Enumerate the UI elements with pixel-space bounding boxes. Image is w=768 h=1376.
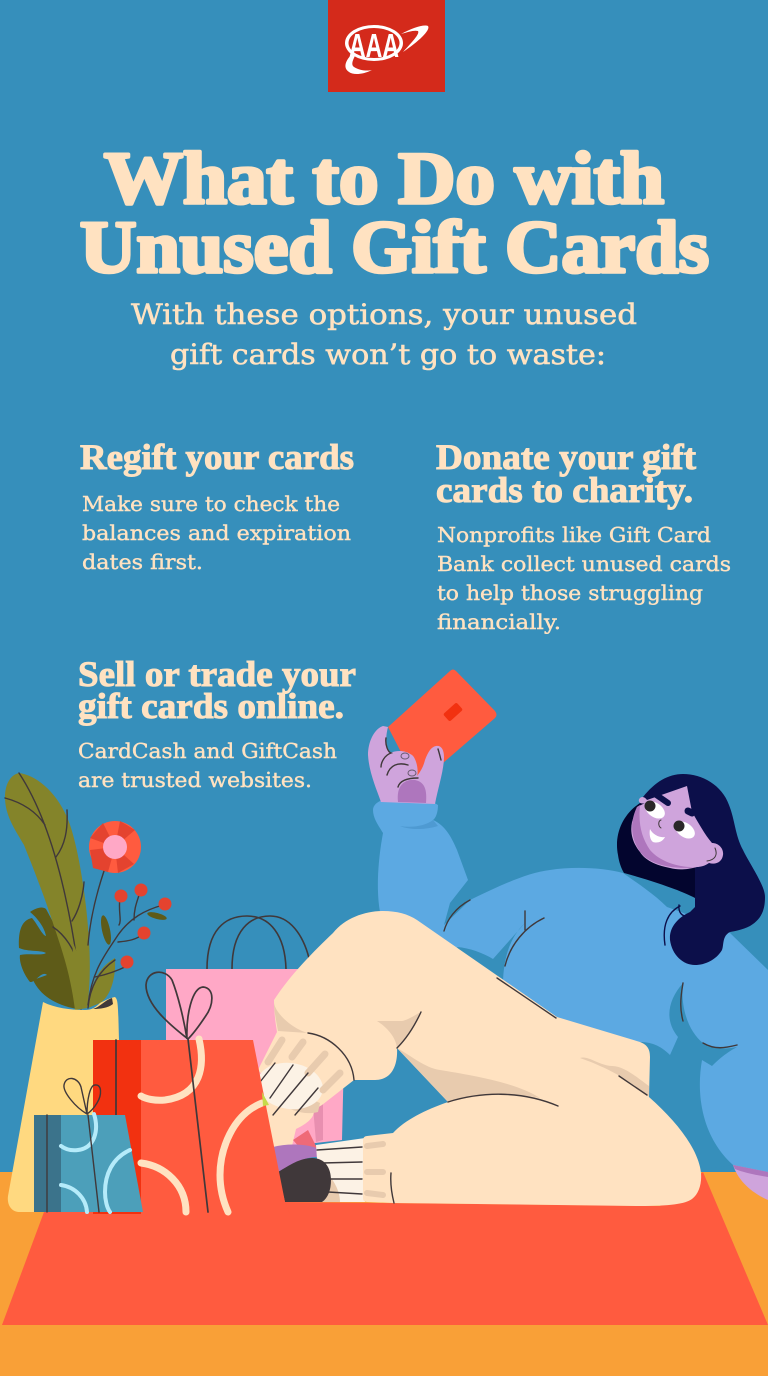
card chip bbox=[443, 702, 463, 722]
gift card bbox=[388, 670, 496, 785]
sweater body and arm bbox=[373, 798, 768, 1172]
trouser shading bbox=[274, 1003, 649, 1102]
title: Unused Gift Cards bbox=[80, 207, 709, 289]
option: donate: financially. bbox=[437, 610, 561, 634]
sock under upper cuff bbox=[258, 1078, 320, 1113]
midriff bbox=[733, 1165, 768, 1200]
cuff ribs bbox=[268, 1040, 340, 1090]
trouser folds bbox=[308, 978, 647, 1203]
option: donate: to help those struggling bbox=[437, 581, 703, 605]
option: regift: dates first. bbox=[82, 550, 203, 574]
subtitle: gift cards won’t go to waste: bbox=[170, 338, 606, 371]
option: sell or trade bbox=[78, 654, 356, 792]
option: sell or trade: Sell or trade your bbox=[78, 654, 356, 694]
leaf veins bbox=[5, 773, 115, 1009]
option: donate: Nonprofits like Gift Card bbox=[437, 523, 711, 547]
option: donate: Donate your gift bbox=[436, 437, 696, 477]
cuff shadow bbox=[400, 820, 438, 829]
option: regift: Make sure to check the bbox=[82, 492, 340, 516]
foot bbox=[262, 1100, 314, 1148]
person bbox=[254, 670, 768, 1206]
large red gift bbox=[93, 972, 290, 1214]
option: regift: balances and expiration bbox=[82, 521, 351, 545]
small leaf bbox=[88, 958, 115, 1008]
logo: AAA bbox=[328, 0, 445, 92]
shopping bag bbox=[166, 916, 346, 1160]
hair back bbox=[617, 800, 700, 898]
option: sell or trade: are trusted websites. bbox=[78, 768, 312, 792]
logo: AAA: AAA bbox=[349, 27, 399, 64]
sweater shadow bbox=[630, 983, 737, 1172]
shoe bbox=[278, 1158, 331, 1202]
option: donate bbox=[436, 437, 731, 634]
sweater fold lines bbox=[444, 900, 737, 1048]
title: What to Do with bbox=[104, 138, 664, 220]
hair front bbox=[643, 774, 765, 965]
eyes and mouth bbox=[642, 798, 668, 822]
option: sell or trade: CardCash and GiftCash bbox=[78, 739, 337, 763]
option: regift: Regift your cards bbox=[80, 437, 354, 477]
head and face bbox=[631, 786, 723, 869]
option: donate: cards to charity. bbox=[436, 470, 693, 510]
option: regift bbox=[80, 437, 354, 574]
floor bbox=[0, 1172, 768, 1376]
mat bbox=[2, 1172, 768, 1325]
vase bbox=[8, 997, 125, 1212]
flower bbox=[88, 871, 104, 945]
subtitle bbox=[131, 298, 637, 371]
title bbox=[80, 138, 709, 289]
hand bbox=[368, 726, 444, 804]
subtitle: With these options, your unused bbox=[131, 298, 637, 331]
monstera leaf bbox=[19, 908, 80, 1009]
option: sell or trade: gift cards online. bbox=[78, 686, 344, 726]
plant and vase bbox=[5, 773, 172, 1212]
small blue gift bbox=[34, 1078, 143, 1212]
option: donate: Bank collect unused cards bbox=[437, 552, 731, 576]
tall leaf bbox=[5, 773, 90, 1010]
trousers bbox=[258, 911, 701, 1206]
lower cuff bbox=[316, 1138, 365, 1202]
berry branch bbox=[88, 892, 163, 1005]
